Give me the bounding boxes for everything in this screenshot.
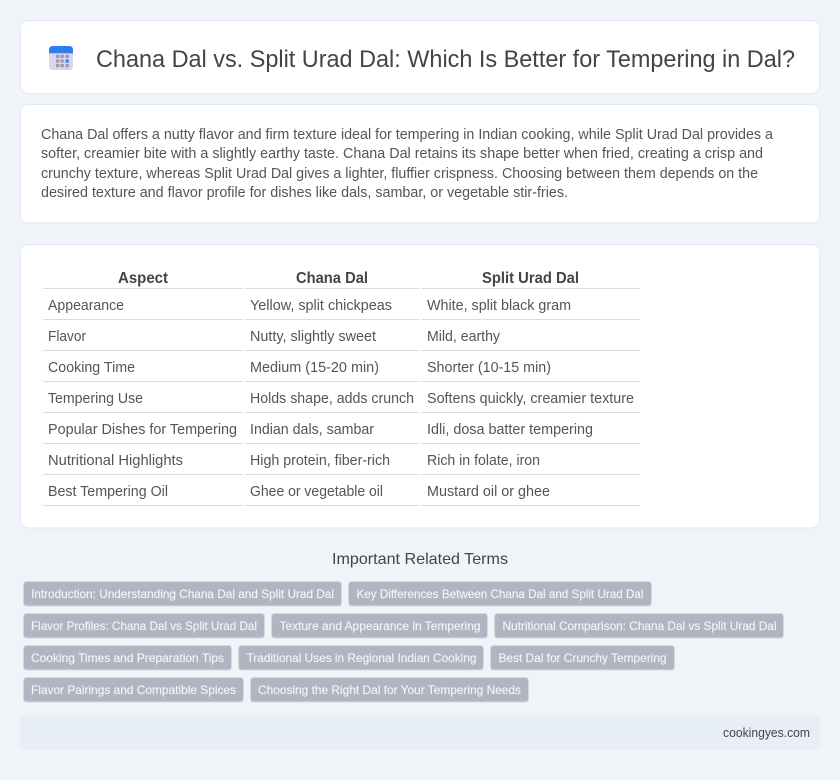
panel: header bbox=[20, 20, 820, 94]
text block: summary paragraph: Chana Dal offers a nutty flavor and firm texture ideal for tempering in Indian cooking, while Split Urad Dal provides a bbox=[41, 127, 773, 143]
table header row bbox=[118, 270, 579, 287]
tag: Key Differences Between Chana Dal and Split Urad Dal bbox=[356, 587, 644, 601]
table row: flavor: Mild, earthy bbox=[427, 329, 501, 345]
tag bbox=[24, 614, 264, 638]
tag bbox=[272, 614, 488, 638]
tag bbox=[348, 582, 652, 606]
table row: tempering use bbox=[48, 391, 634, 407]
icon: calendar bbox=[49, 46, 73, 70]
footer: cookingyes.com bbox=[723, 726, 810, 740]
table row: flavor: Nutty, slightly sweet bbox=[250, 329, 376, 345]
tag bbox=[24, 678, 244, 702]
tag bbox=[238, 646, 484, 670]
footer bbox=[20, 716, 820, 750]
table row: appearance bbox=[48, 298, 571, 314]
related term tags bbox=[24, 582, 784, 702]
tag bbox=[490, 646, 674, 670]
title: Chana Dal vs. Split Urad Dal: Which Is Better for Tempering in Dal? bbox=[96, 46, 795, 73]
table row: appearance: Yellow, split chickpeas bbox=[250, 298, 392, 314]
table row: popular dishes: Idli, dosa batter tempering bbox=[427, 422, 593, 438]
tag: Cooking Times and Preparation Tips bbox=[31, 651, 224, 665]
table row: best oil: Best Tempering Oil bbox=[48, 484, 168, 500]
tag bbox=[24, 646, 232, 670]
text block: summary paragraph bbox=[41, 127, 773, 201]
tag: Flavor Pairings and Compatible Spices bbox=[31, 683, 236, 697]
table row: popular dishes bbox=[48, 422, 593, 438]
table row: best oil bbox=[48, 484, 550, 500]
table row: best oil: Mustard oil or ghee bbox=[427, 484, 550, 500]
tag: Choosing the Right Dal for Your Tempering Needs bbox=[258, 683, 521, 697]
table row: popular dishes: Popular Dishes for Tempering bbox=[48, 422, 237, 438]
table row: tempering use: Holds shape, adds crunch bbox=[250, 391, 414, 407]
table row: nutritional highlights: High protein, fiber-rich bbox=[250, 453, 390, 469]
table header row: Aspect bbox=[118, 270, 169, 287]
table row: popular dishes: Indian dals, sambar bbox=[250, 422, 374, 438]
table row: appearance: White, split black gram bbox=[427, 298, 571, 314]
text block: summary paragraph: crunchy texture, whereas Split Urad Dal gives a lighter, fluffier crispness. Choosing between them depends on the bbox=[41, 166, 758, 182]
text block: summary paragraph: softer, creamier bite with a slightly earthy taste. Chana Dal retains its shape better when fried, creating a crisp and bbox=[41, 146, 763, 162]
table row: appearance: Appearance bbox=[48, 298, 124, 314]
table row: cooking time: Cooking Time bbox=[48, 360, 135, 376]
tag bbox=[250, 678, 528, 702]
text block: summary paragraph: desired texture and flavor profile for dishes like dals, sambar, or vegetable stir-fries. bbox=[41, 185, 568, 201]
table row: nutritional highlights: Rich in folate, iron bbox=[427, 453, 540, 469]
tag bbox=[494, 614, 784, 638]
table header row: Chana Dal bbox=[296, 270, 368, 287]
tag: Flavor Profiles: Chana Dal vs Split Urad Dal bbox=[31, 619, 257, 633]
table row: flavor bbox=[48, 329, 501, 345]
table row: nutritional highlights bbox=[48, 453, 540, 469]
table row: best oil: Ghee or vegetable oil bbox=[250, 484, 383, 500]
table row: tempering use: Tempering Use bbox=[48, 391, 143, 407]
tag bbox=[24, 582, 342, 606]
table row: flavor: Flavor bbox=[48, 329, 86, 345]
panel: comparison table bbox=[20, 244, 820, 528]
tag: Nutritional Comparison: Chana Dal vs Split Urad Dal bbox=[502, 619, 776, 633]
table row: cooking time: Shorter (10-15 min) bbox=[427, 360, 551, 376]
tag: Introduction: Understanding Chana Dal and Split Urad Dal bbox=[31, 587, 334, 601]
table row: cooking time: Medium (15-20 min) bbox=[250, 360, 379, 376]
panel: summary bbox=[20, 104, 820, 223]
tag: Best Dal for Crunchy Tempering bbox=[498, 651, 666, 665]
heading: related terms: Important Related Terms bbox=[332, 551, 508, 568]
table row: tempering use: Softens quickly, creamier texture bbox=[427, 391, 634, 407]
table row: cooking time bbox=[48, 360, 551, 376]
table header row: Split Urad Dal bbox=[482, 270, 579, 287]
tag: Texture and Appearance in Tempering bbox=[280, 619, 480, 633]
table row: nutritional highlights: Nutritional Highlights bbox=[48, 453, 183, 469]
tag: Traditional Uses in Regional Indian Cooking bbox=[246, 651, 476, 665]
